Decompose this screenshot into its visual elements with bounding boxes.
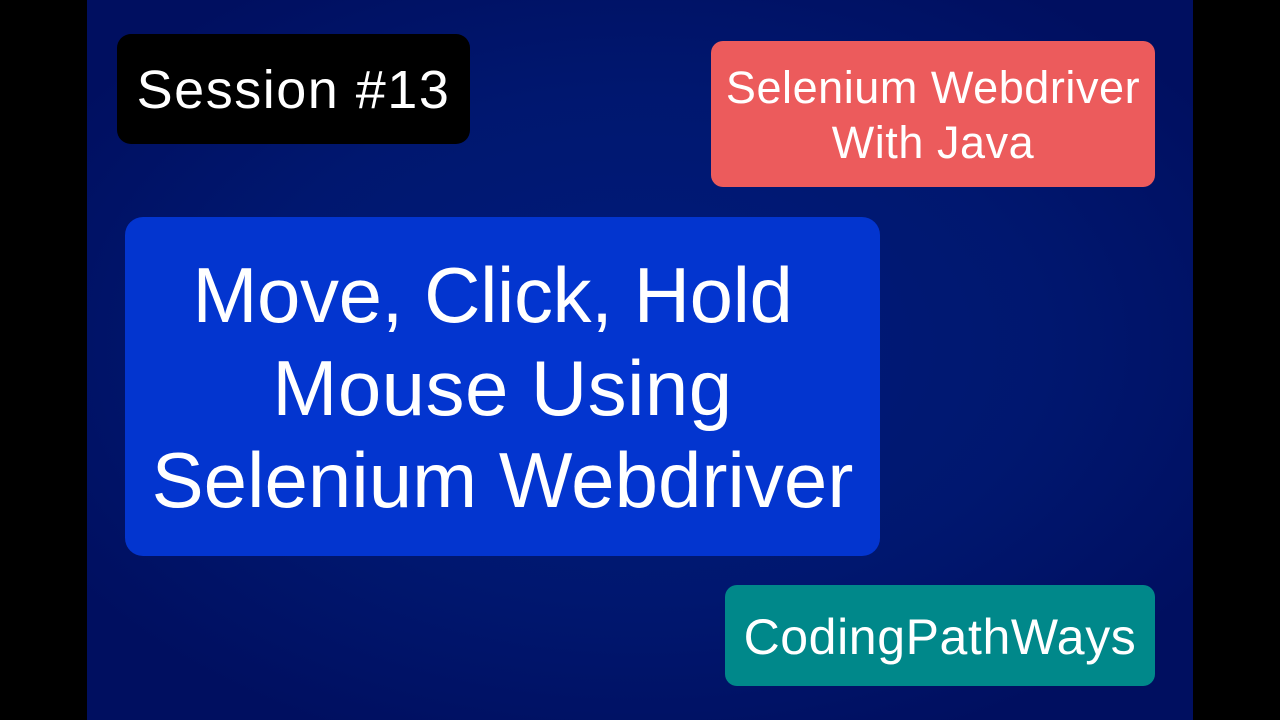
main title panel	[125, 217, 880, 556]
badge: course name	[711, 41, 1155, 187]
channel text: CodingPathWays	[744, 609, 1136, 665]
badge: session number	[117, 34, 470, 144]
course text	[726, 62, 1140, 168]
course text: Selenium Webdriver	[726, 62, 1140, 113]
badge: channel name	[725, 585, 1155, 686]
main title text: Mouse Using	[272, 344, 733, 432]
main title text: Selenium Webdriver	[152, 436, 853, 524]
main title text	[152, 251, 853, 524]
course text: With Java	[832, 117, 1034, 168]
session text: Session #13	[137, 60, 450, 120]
main title text: Move, Click, Hold	[192, 251, 793, 339]
